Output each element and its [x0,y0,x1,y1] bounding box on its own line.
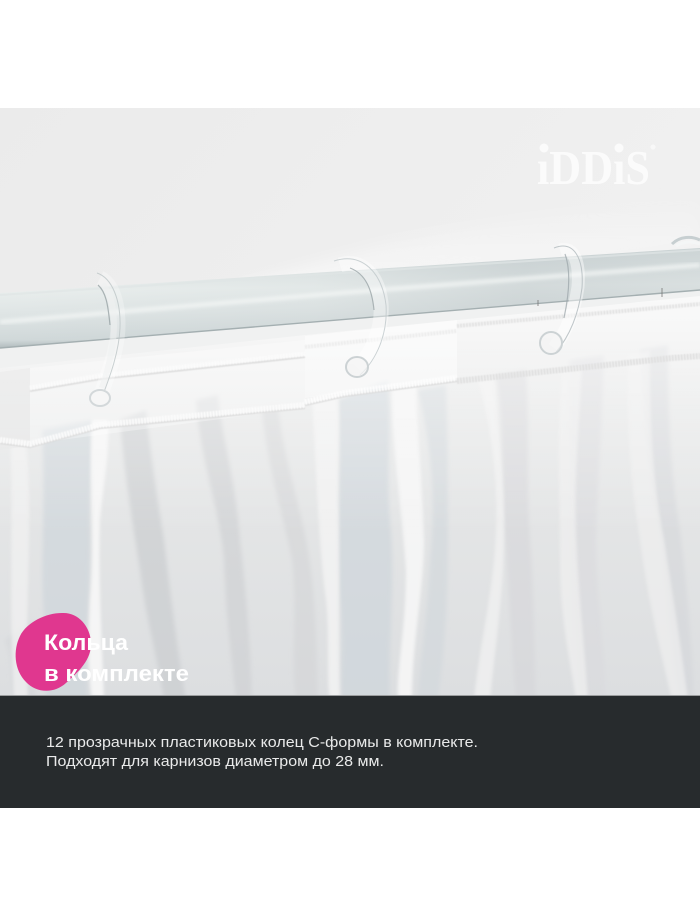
photo: curtain on rod [0,108,700,700]
wall [0,108,700,293]
soft grey and blue stripes [43,364,681,695]
caption text: 12 прозрачных пластиковых колец С-формы в комплекте. [46,735,478,751]
ring 2 [334,259,386,377]
shadow band under rod [0,348,182,368]
badge heading: в комплекте [44,661,189,686]
photo bottom edge line [0,695,700,696]
header bands of curtain [0,304,700,450]
badge heading: Кольца [44,630,129,655]
brand logo: IDDIS: ıDDıS [537,140,650,195]
infographic canvas [0,108,700,808]
caption text: Подходят для карнизов диаметром до 28 мм. [46,754,384,770]
curtain rod [0,248,700,348]
dark caption panel [0,696,700,808]
curtain fabric with wavy stripes [0,296,700,700]
ring 4 [672,237,700,246]
stitched seams [0,304,700,447]
ring 3 [540,246,582,354]
upper curtain veil [46,296,700,451]
soft white stripes [10,350,688,700]
caption text [46,735,478,770]
small hooks [538,288,662,306]
pink blob badge [16,613,91,691]
badge heading [44,630,189,686]
ring 1 [90,273,120,406]
